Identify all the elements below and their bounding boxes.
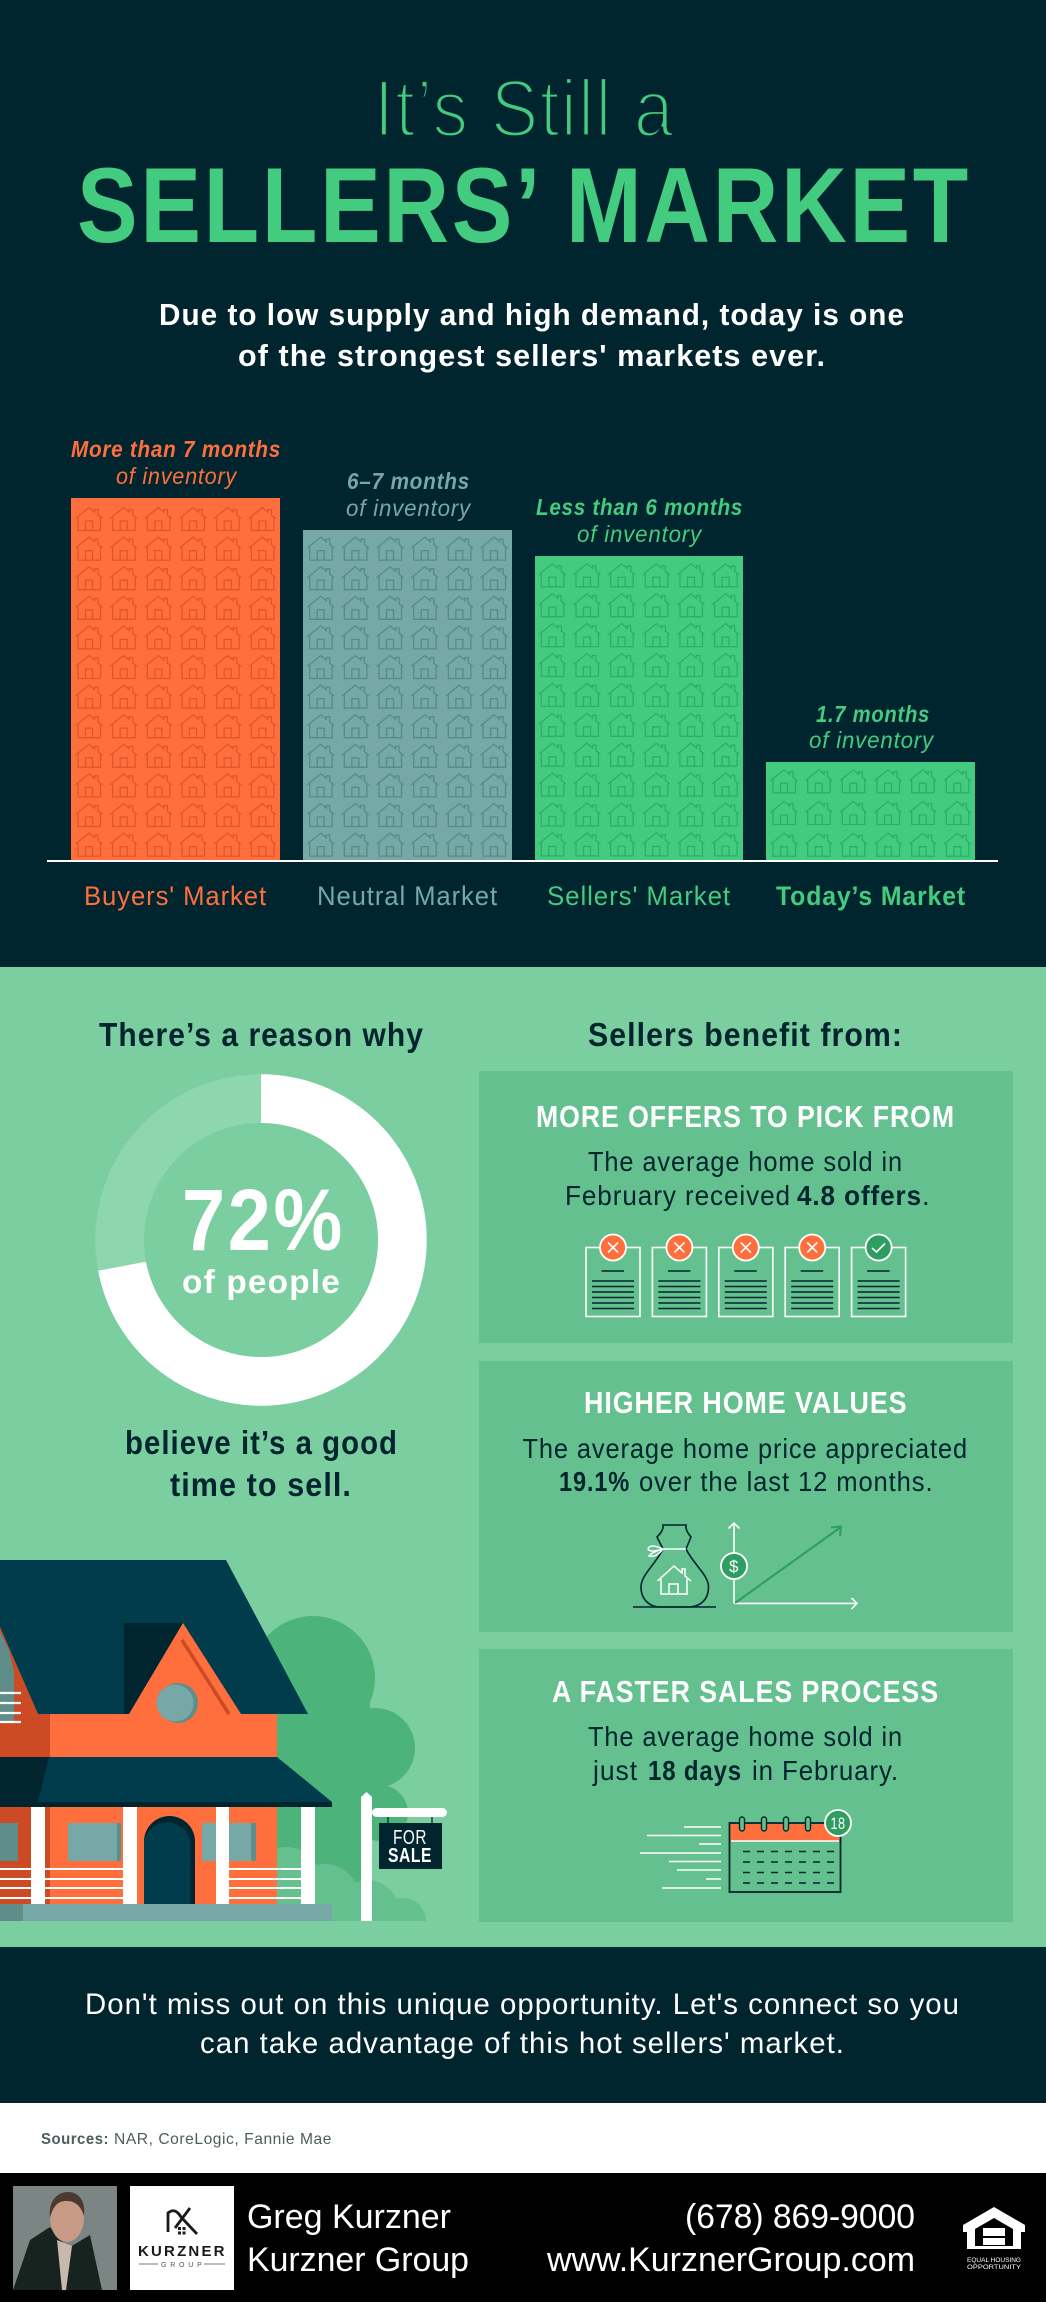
footer agent name bbox=[247, 2198, 469, 2279]
footer agent name: Kurzner Group bbox=[247, 2241, 469, 2279]
illustration: trees and bushes bbox=[251, 1616, 430, 1947]
icon: five offer documents bbox=[586, 1234, 906, 1316]
bar: buyers' market bbox=[71, 436, 281, 911]
card: a faster sales process: A FASTER SALES PROCESS bbox=[552, 1674, 939, 1709]
title: It’s Still a bbox=[374, 64, 675, 154]
icon: speed lines bbox=[640, 1827, 721, 1888]
sources: Sources: bbox=[41, 2131, 109, 2148]
icon: calendar bbox=[730, 1810, 851, 1892]
icon: equal housing opportunity bbox=[963, 2207, 1025, 2271]
footer agent name: Greg Kurzner bbox=[247, 2198, 451, 2236]
panel: green section background bbox=[0, 967, 1046, 1947]
illustration: orange house bbox=[0, 1560, 332, 1921]
card: more offers to pick from: MORE OFFERS TO PICK FROM bbox=[536, 1099, 955, 1134]
bar: today's market: Today’s Market bbox=[776, 881, 966, 911]
card: more offers to pick from bbox=[479, 1071, 1013, 1343]
bar: neutral market: 6–7 months bbox=[347, 468, 470, 494]
footer contact details bbox=[546, 2198, 915, 2279]
call to action text: can take advantage of this hot sellers' market. bbox=[200, 2027, 845, 2060]
icon: calendar: 18 bbox=[830, 1814, 846, 1833]
footer logo: Kurzner Group: GROUP bbox=[161, 2262, 202, 2269]
icon: money bag with house bbox=[633, 1525, 716, 1607]
donut chart: 72 percent: of people bbox=[182, 1263, 341, 1300]
card: more offers to pick from: 4.8 offers bbox=[797, 1180, 922, 1211]
bar: sellers' market: Less than 6 months bbox=[536, 494, 743, 520]
bar: neutral market bbox=[303, 468, 512, 911]
card: a faster sales process: in February. bbox=[752, 1755, 899, 1786]
icon: rising value chart bbox=[721, 1523, 857, 1609]
heading: sellers benefit from: Sellers benefit from: bbox=[588, 1016, 903, 1053]
text: believe it's a good time to sell: time to sell. bbox=[170, 1466, 352, 1503]
card: more offers to pick from: . bbox=[922, 1180, 931, 1211]
icon: equal housing opportunity: EQUAL HOUSING bbox=[967, 2257, 1021, 2264]
text: believe it's a good time to sell: believe it’s a good bbox=[125, 1424, 398, 1461]
illustration: for sale sign bbox=[361, 1792, 447, 1921]
subtitle: Due to low supply and high demand, today is one bbox=[159, 297, 905, 332]
footer logo: Kurzner Group: KURZNER bbox=[138, 2243, 225, 2260]
card: higher home values: HIGHER HOME VALUES bbox=[584, 1385, 908, 1420]
footer photo: agent portrait bbox=[13, 2186, 117, 2290]
heading: there's a reason why: There’s a reason why bbox=[99, 1016, 424, 1053]
icon: rising value chart: $ bbox=[729, 1557, 739, 1576]
bar: neutral market: Neutral Market bbox=[317, 881, 498, 911]
donut chart: 72 percent: 72% bbox=[182, 1172, 345, 1269]
panel: dark header and bar chart background bbox=[0, 0, 1046, 967]
bar: today's market bbox=[766, 701, 975, 911]
card: a faster sales process bbox=[479, 1649, 1013, 1922]
text: believe it's a good time to sell bbox=[125, 1424, 398, 1503]
card: higher home values: over the last 12 months. bbox=[639, 1466, 934, 1497]
call to action text bbox=[85, 1988, 960, 2060]
card: more offers to pick from: The average home sold in bbox=[588, 1146, 903, 1177]
bar chart: months of inventory bbox=[47, 436, 998, 911]
subtitle: of the strongest sellers' markets ever. bbox=[238, 338, 826, 373]
bar: buyers' market: of inventory bbox=[116, 463, 238, 489]
bar: buyers' market: More than 7 months bbox=[71, 436, 281, 462]
call to action text: Don't miss out on this unique opportunity. Let's connect so you bbox=[85, 1988, 960, 2021]
illustration: for sale sign: FOR bbox=[393, 1827, 427, 1849]
footer contact details: (678) 869-9000 bbox=[685, 2198, 915, 2236]
subtitle bbox=[159, 297, 905, 373]
card: higher home values: 19.1% bbox=[559, 1466, 630, 1497]
donut chart: 72 percent bbox=[120, 1099, 402, 1381]
bar: today's market: 1.7 months bbox=[816, 701, 930, 727]
bar: sellers' market: Sellers' Market bbox=[547, 881, 731, 911]
sources: NAR, CoreLogic, Fannie Mae bbox=[114, 2131, 332, 2148]
card: a faster sales process: just bbox=[592, 1755, 638, 1786]
bar: neutral market: of inventory bbox=[346, 495, 472, 521]
bar: sellers' market: of inventory bbox=[577, 521, 703, 547]
bar: today's market: of inventory bbox=[809, 727, 935, 753]
illustration: for sale sign: SALE bbox=[388, 1845, 432, 1867]
bar: buyers' market: Buyers' Market bbox=[84, 881, 267, 911]
panel: footer background bbox=[0, 2173, 1046, 2302]
title bbox=[77, 64, 971, 265]
footer contact details: www.KurznerGroup.com bbox=[546, 2241, 915, 2279]
card: a faster sales process: 18 days bbox=[648, 1755, 742, 1786]
card: higher home values bbox=[479, 1361, 1013, 1632]
icon: equal housing opportunity: OPPORTUNITY bbox=[967, 2264, 1022, 2271]
bar: sellers' market bbox=[535, 494, 743, 911]
card: more offers to pick from: February received bbox=[565, 1180, 791, 1211]
panel: call to action background bbox=[0, 1947, 1046, 2103]
card: a faster sales process: The average home sold in bbox=[588, 1721, 903, 1752]
card: higher home values: The average home price appreciated bbox=[522, 1433, 968, 1464]
footer logo: Kurzner Group bbox=[130, 2186, 234, 2290]
